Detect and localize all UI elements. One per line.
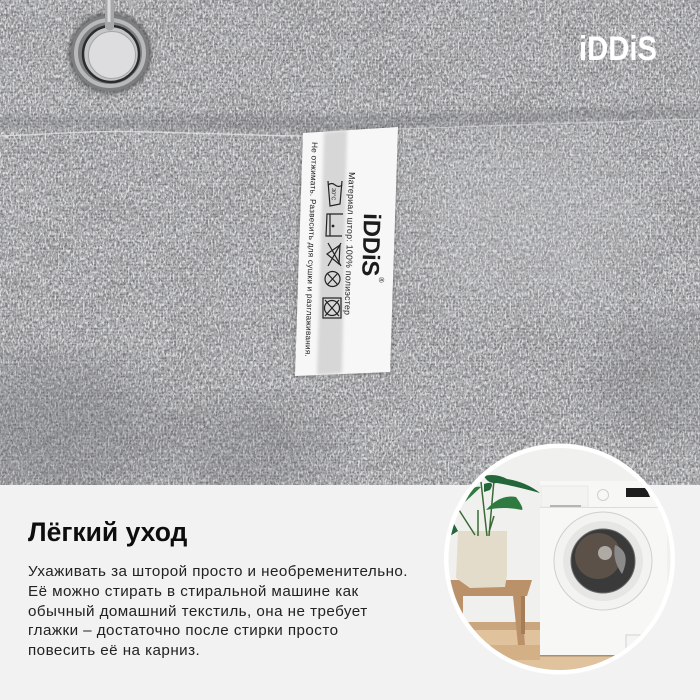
fabric hem seam — [0, 106, 700, 136]
washing machine — [540, 481, 667, 656]
care label — [295, 127, 398, 376]
heading: Лёгкий уход — [28, 517, 187, 547]
body text: повесить её на карниз. — [28, 642, 200, 659]
care icon: no dry clean — [323, 298, 341, 318]
round photo: washing machine and plant — [444, 444, 675, 674]
label text: instructions: Не отжимать. Развесить для сушки и разглаживания. — [303, 142, 319, 357]
metal eyelet — [68, 0, 152, 94]
bottom panel — [0, 485, 700, 700]
floor — [468, 622, 645, 670]
care icon: wash 30 — [328, 181, 342, 206]
body text: Её можно стирать в стиральной машине как — [28, 583, 359, 600]
care icon: no tumble — [325, 272, 340, 286]
plant — [450, 475, 540, 536]
fabric bag — [456, 531, 507, 588]
fabric base — [0, 0, 700, 500]
control panel — [541, 486, 588, 507]
body text: обычный домашний текстиль, она не требует — [28, 603, 368, 620]
care icon: no bleach — [327, 243, 341, 266]
label grey band — [317, 130, 347, 375]
label registered mark: ® — [377, 277, 386, 283]
door — [554, 512, 652, 610]
care icon: wash 30: 30°C — [330, 188, 336, 200]
brand logo: ® — [656, 33, 660, 39]
brand logo: iDDiS — [579, 30, 657, 68]
stool — [450, 580, 532, 645]
body text: Ухаживать за шторой просто и необременительно. — [28, 563, 408, 580]
wall — [448, 448, 670, 622]
label text: material: Материал штор: 100% полиэстер — [343, 172, 357, 315]
care icon: tumble dry — [326, 214, 343, 236]
body text — [28, 563, 408, 659]
body text: глажки – достаточно после стирки просто — [28, 622, 338, 639]
label logo: iDDiS — [356, 213, 385, 277]
